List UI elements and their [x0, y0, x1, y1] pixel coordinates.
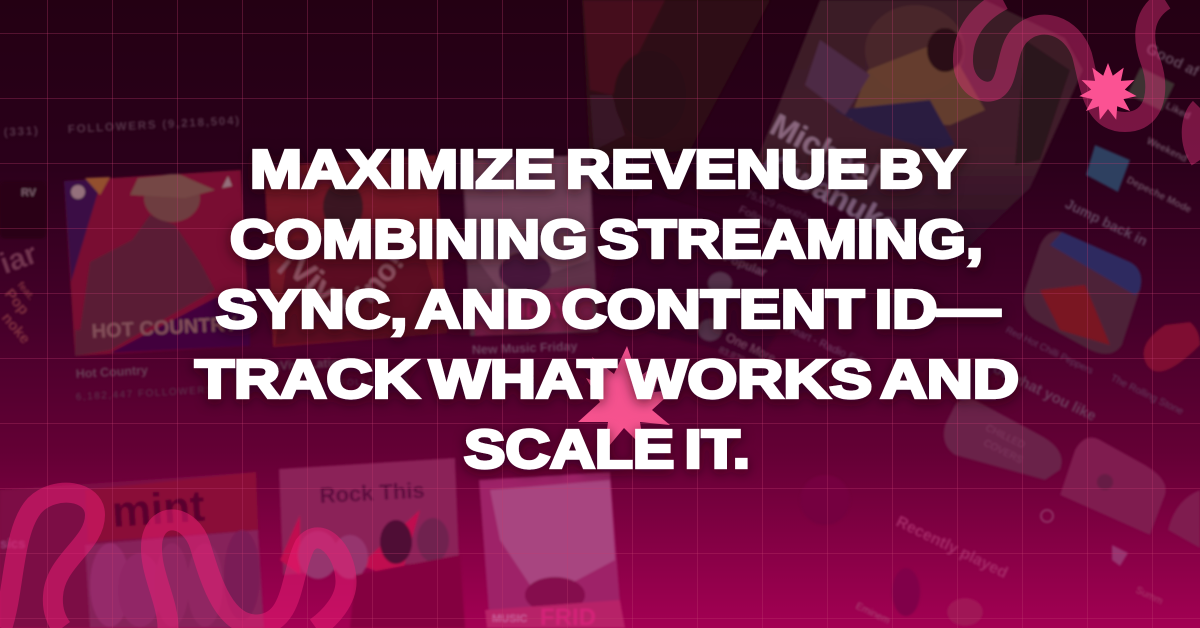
panel: left cut-off cover Viar: Pop [1, 286, 32, 318]
icon: pink star behind headline [578, 346, 674, 452]
text: Hot Country caption [75, 363, 215, 403]
panel: left cut-off cover Viar: RV [21, 187, 37, 199]
panel: Viva Latino cover: ¡Viva [273, 242, 360, 324]
panel: dark phone home screen: of what you like [990, 360, 1099, 425]
panel: dark track list: Popular [722, 250, 769, 280]
text: followers counter: (331) [4, 125, 40, 139]
icon: pink starburst top right [1079, 63, 1137, 120]
title headline: MAXIMIZE REVENUE BY [250, 140, 965, 200]
panel: mint playlist cover [0, 472, 264, 628]
panel: band photo below mint [90, 530, 260, 627]
panel: mint playlist cover: sics [0, 536, 25, 551]
panel: dark phone home screen: Weekend [1145, 136, 1189, 165]
text: Viva Latino caption: FOLLOWERS [340, 374, 410, 388]
panel: dark phone home screen [800, 40, 1200, 627]
panel: Rock This playlist cover: Rock This [319, 478, 425, 508]
panel: dark phone home screen: Summ [1134, 585, 1164, 607]
panel: dark phone home screen: Good af [1143, 40, 1200, 81]
title headline: SCALE IT. [464, 420, 750, 480]
panel: left cut-off cover Viar [0, 182, 46, 347]
title headline: SYNC, AND CONTENT ID— [216, 280, 1000, 340]
title headline: COMBINING STREAMING, [230, 210, 983, 270]
panel: dark phone home screen: Red Hot Chilli Peppers [1004, 325, 1095, 377]
panel: dark phone home screen: Jump back in [1063, 195, 1150, 249]
panel: dark phone home screen: Liked [1164, 101, 1192, 122]
panel: dark album at top centre [582, 0, 770, 160]
panel: New Music Friday poster at bottom: MUSIC [492, 613, 528, 625]
title headline: TRACK WHAT WORKS AND [195, 350, 1019, 410]
text: Hot Country caption: Hot Country [75, 363, 148, 381]
panel: Rock This playlist cover [279, 458, 465, 628]
text: Viva Latino caption [275, 355, 410, 388]
title headline [195, 140, 1019, 480]
text: Hot Country caption: 6,182,447 FOLLOWERS [76, 385, 215, 403]
panel: dark phone home screen: COVERS [982, 438, 1025, 466]
panel: New Music Friday cover: FRIDAY [490, 298, 570, 323]
panel: New Music Friday cover: New Music Friday [472, 339, 578, 357]
panel: New Music Friday poster at bottom [479, 472, 625, 628]
text: Viva Latino caption: ¡Viva Latino! [275, 355, 351, 373]
panel: dark phone home screen: Depeche Mode [1125, 175, 1193, 216]
panel: New Music Friday cover [462, 155, 598, 357]
panel: dark track list: Heart - Radio Edit [784, 322, 868, 370]
panel: Michael Kiwanuka artist photo: Michael [765, 106, 885, 193]
panel: dark phone home screen: Recently played [893, 513, 1010, 582]
panel: dark track list: One More [724, 330, 778, 365]
panel: dark track list: 75,529 monthly [744, 189, 811, 224]
panel: Michael Kiwanuka artist photo: Kiwanuka [757, 142, 906, 244]
panel: Hot Country playlist cover: HOT COUNTRY [91, 313, 239, 343]
panel: Hot Country playlist cover [64, 170, 250, 356]
panel: dark phone home screen: CHILLED [984, 423, 1026, 451]
panel: dark phone home screen: The Rolling Stone [1109, 373, 1185, 418]
panel: left cut-off cover Viar: feat. [15, 280, 36, 303]
panel: dark track list: 83,879,6 [717, 345, 753, 369]
panel: dark phone home screen: Eminem [854, 601, 891, 627]
panel: Viva Latino cover [264, 155, 447, 347]
decorative squiggle: top right [963, 0, 1200, 160]
decorative squiggle: bottom left [2, 493, 346, 628]
panel: Viva Latino cover: ino! [350, 246, 411, 309]
panel: dark track list: Following [737, 204, 784, 234]
text: followers counter [4, 115, 241, 139]
panel: Michael Kiwanuka artist photo [755, 0, 1083, 255]
text: followers counter: FOLLOWERS (9,218,504) [68, 115, 241, 136]
panel: mint playlist cover: mint [110, 482, 207, 537]
panel: dark track list [600, 189, 868, 370]
